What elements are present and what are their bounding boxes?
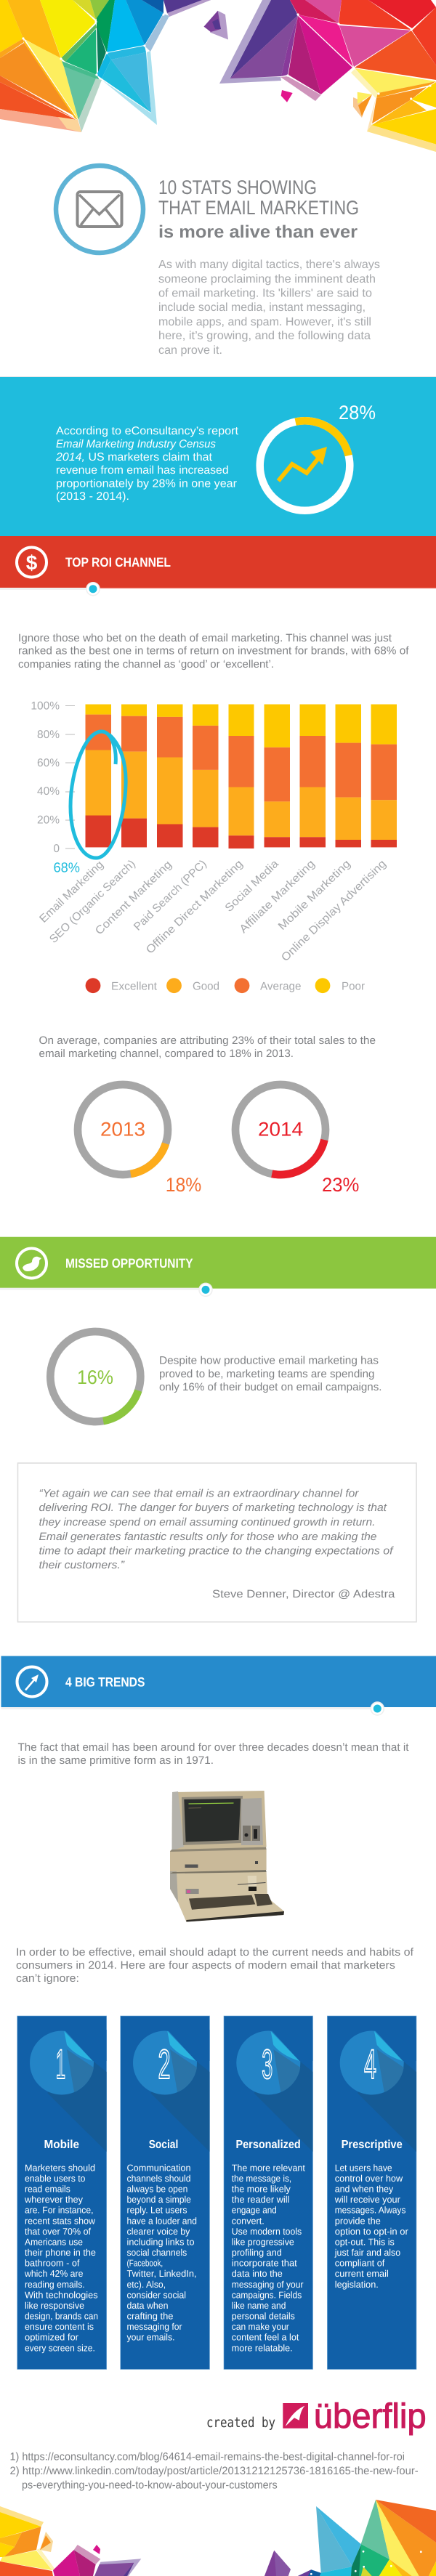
heading: MISSED OPPORTUNITY bbox=[65, 1256, 193, 1271]
card text: which 42% are bbox=[24, 2268, 83, 2279]
card text: their phone in the bbox=[25, 2247, 96, 2258]
hand-drawn highlight ellipse bbox=[70, 732, 126, 858]
small pink shard bbox=[281, 90, 293, 102]
number badge bbox=[30, 2030, 107, 2152]
intro paragraph: mobile apps, and spam. However, it's still bbox=[158, 316, 371, 328]
panel: personalized card bbox=[224, 2016, 312, 2370]
card text: campaigns. Fields bbox=[232, 2289, 302, 2300]
donut: 2013 bbox=[78, 1085, 201, 1196]
card text: every screen size. bbox=[25, 2342, 95, 2353]
card text: like responsive bbox=[25, 2300, 84, 2311]
title: THAT EMAIL MARKETING bbox=[158, 197, 359, 219]
revenue text: 2014, US marketers claim that bbox=[55, 451, 213, 463]
intro paragraph: of email marketing. Its 'killers' are said to bbox=[158, 288, 372, 299]
number badge: 3 bbox=[262, 2041, 272, 2088]
card text: consider social bbox=[126, 2289, 186, 2300]
card text: engage and bbox=[232, 2205, 277, 2216]
bottom right polygon artwork bbox=[265, 2500, 436, 2576]
card text: your emails. bbox=[126, 2332, 174, 2343]
card title: Social bbox=[149, 2139, 178, 2151]
card text: social channels bbox=[126, 2247, 187, 2258]
small orange shard bbox=[353, 92, 372, 118]
card text: have a louder and bbox=[126, 2215, 197, 2226]
card text: compliant of bbox=[335, 2258, 385, 2269]
panel: prescriptive card bbox=[327, 2016, 416, 2370]
section header: top roi channel bbox=[0, 536, 436, 596]
card text: Marketers should bbox=[25, 2162, 95, 2173]
card text: always be open bbox=[126, 2184, 187, 2195]
card text: read emails bbox=[25, 2184, 70, 2195]
quote attribution: Steve Denner, Director @ Adestra bbox=[212, 1588, 395, 1600]
card text: control over how bbox=[335, 2173, 403, 2184]
68 percent callout: 68% bbox=[54, 860, 80, 875]
card text bbox=[232, 2162, 305, 2353]
budget paragraph bbox=[159, 1355, 382, 1393]
card text: the message is, bbox=[232, 2173, 291, 2184]
quote text: “Yet again we can see that email is an extraordinary channel for bbox=[39, 1488, 360, 1499]
card text: are. For instance, bbox=[25, 2205, 93, 2216]
icon: dollar bbox=[17, 548, 47, 577]
donut: 2014: 23% bbox=[322, 1174, 359, 1196]
card text: reply. Let users bbox=[126, 2205, 187, 2216]
progress dot bbox=[371, 1702, 384, 1715]
donut: 2013: 2013 bbox=[100, 1118, 145, 1140]
top left polygon artwork bbox=[0, 0, 211, 132]
icon: arrow bbox=[17, 1666, 47, 1697]
y axis: 100% bbox=[31, 700, 60, 712]
icon: bird bbox=[17, 1248, 47, 1279]
card text: like progressive bbox=[232, 2236, 294, 2248]
icon: email envelope in circle bbox=[56, 166, 143, 253]
quote text: time to adapt their marketing practice to the changing expectations of bbox=[39, 1544, 394, 1557]
card text: just fair and also bbox=[334, 2247, 400, 2258]
title: 10 STATS SHOWING bbox=[158, 177, 317, 198]
card text bbox=[334, 2162, 409, 2290]
card text: enable users to bbox=[25, 2173, 85, 2184]
x axis labels: Mobile Marketing bbox=[276, 858, 353, 933]
panel: social card bbox=[121, 2016, 209, 2370]
revenue text: revenue from email has increased bbox=[56, 464, 229, 477]
roi paragraph: companies rating the channel as ‘good’ or ‘excellent’. bbox=[18, 658, 274, 671]
donut: 2013: 18% bbox=[166, 1174, 201, 1196]
chart legend bbox=[86, 978, 365, 993]
x axis labels: Online Display Advertising bbox=[279, 858, 389, 964]
donut: 16 percent: 16% bbox=[77, 1366, 113, 1388]
intro paragraph: As with many digital tactics, there's always bbox=[158, 259, 380, 271]
card text: design, brands can bbox=[25, 2310, 98, 2322]
bars bbox=[86, 705, 397, 848]
chart legend: Excellent bbox=[111, 981, 158, 992]
budget paragraph: Despite how productive email marketing has bbox=[159, 1355, 379, 1367]
chart legend: Average bbox=[260, 981, 301, 992]
trends paragraph: is in the same primitive form as in 1971. bbox=[17, 1754, 214, 1767]
quote text bbox=[39, 1488, 394, 1571]
card text: bathroom - of bbox=[25, 2258, 80, 2269]
progress dot bbox=[199, 1283, 212, 1296]
card text: the reader will bbox=[232, 2194, 289, 2205]
card text: the more likely bbox=[232, 2184, 291, 2195]
card text: clearer voice by bbox=[126, 2226, 190, 2237]
number badge bbox=[340, 2030, 416, 2152]
x axis labels: Paid Search (PPC) bbox=[132, 858, 209, 933]
revenue text: Email Marketing Industry Census bbox=[56, 438, 216, 450]
x axis labels bbox=[37, 857, 389, 964]
aspects paragraph: can’t ignore: bbox=[16, 1972, 79, 1985]
card text bbox=[24, 2162, 98, 2353]
card text: can make your bbox=[232, 2321, 289, 2332]
progress dot bbox=[86, 583, 100, 596]
card text: and when they bbox=[335, 2184, 394, 2195]
x axis labels: Affiliate Marketing bbox=[237, 858, 318, 936]
roi paragraph: Ignore those who bet on the death of email marketing. This channel was just bbox=[18, 632, 392, 644]
card text: messages. Always bbox=[335, 2205, 405, 2216]
donut: 2014: 2014 bbox=[258, 1118, 303, 1140]
revenue text bbox=[55, 425, 239, 503]
number badge: 1 bbox=[56, 2041, 65, 2088]
aspects paragraph: In order to be effective, email should adapt to the current needs and habits of bbox=[16, 1946, 414, 1959]
x axis labels: SEO (Organic Search) bbox=[47, 858, 138, 946]
chart legend: Poor bbox=[342, 981, 365, 992]
references: 2) http://www.linkedin.com/today/post/article/20131212125736-1816165-the-new-four- bbox=[10, 2465, 419, 2477]
number badge: 2 bbox=[158, 2041, 170, 2088]
revenue text: (2013 - 2014). bbox=[56, 490, 129, 503]
card text: Twitter, LinkedIn, bbox=[126, 2268, 196, 2279]
quote text: they increase spend on email assuming continued growth in return. bbox=[39, 1516, 375, 1528]
revenue text: proportionately by 28% in one year bbox=[56, 478, 237, 490]
y axis bbox=[31, 700, 75, 855]
roi paragraph bbox=[18, 632, 409, 671]
donut: 16 percent bbox=[50, 1332, 140, 1422]
card text: wherever they bbox=[24, 2194, 84, 2205]
card text: recent stats show bbox=[25, 2215, 96, 2226]
card text: legislation. bbox=[335, 2279, 379, 2290]
illustration: vintage computer bbox=[170, 1791, 284, 1922]
sales attribution paragraph: email marketing channel, compared to 18% in 2013. bbox=[39, 1048, 294, 1060]
credit: created by uberflip bbox=[206, 2397, 427, 2436]
card text: will receive your bbox=[334, 2194, 401, 2205]
trends paragraph bbox=[17, 1741, 409, 1767]
card text: messaging of your bbox=[232, 2279, 304, 2290]
card title: Personalized bbox=[235, 2139, 301, 2151]
card text: more relatable. bbox=[232, 2342, 293, 2353]
bottom left polygon artwork bbox=[0, 2506, 141, 2576]
card text bbox=[126, 2162, 197, 2343]
section header: missed opportunity bbox=[0, 1237, 436, 1296]
intro paragraph: someone proclaiming the imminent death bbox=[158, 273, 376, 285]
title bbox=[158, 177, 359, 242]
x axis labels: Offline Direct Marketing bbox=[144, 858, 246, 957]
budget paragraph: proved to be, marketing teams are spending bbox=[159, 1368, 375, 1380]
x axis labels: Email Marketing bbox=[37, 859, 106, 926]
small purple shard bbox=[203, 11, 228, 39]
sales attribution paragraph: On average, companies are attributing 23% of their total sales to the bbox=[39, 1034, 376, 1047]
y axis: 20% bbox=[37, 814, 60, 827]
card text: personal details bbox=[232, 2310, 295, 2322]
card text: optimized for bbox=[25, 2332, 79, 2343]
quote text: Email generates fantastic results only for those who are making the bbox=[39, 1531, 376, 1543]
section header: 4 big trends bbox=[1, 1656, 436, 1715]
credit: created by uberflip: created by bbox=[206, 2415, 275, 2431]
credit: created by uberflip: überflip bbox=[314, 2397, 427, 2436]
28 percent label: 28% bbox=[339, 402, 376, 424]
references bbox=[10, 2451, 419, 2492]
intro paragraph: include social media, instant messaging, bbox=[158, 301, 366, 314]
card text: With technologies bbox=[25, 2289, 98, 2300]
top right polygon artwork bbox=[219, 0, 436, 152]
references: ps-everything-you-need-to-know-about-your-customers bbox=[22, 2479, 278, 2492]
revenue text: According to eConsultancy’s report bbox=[56, 425, 239, 437]
card text: that over 70% of bbox=[25, 2226, 91, 2237]
card title: Mobile bbox=[44, 2139, 79, 2151]
y axis: 80% bbox=[37, 729, 60, 741]
number badge: 4 bbox=[364, 2041, 376, 2088]
stacked bar chart bbox=[31, 700, 397, 964]
card text: provide the bbox=[335, 2215, 381, 2226]
card text: Let users have bbox=[335, 2162, 392, 2173]
aspects paragraph bbox=[16, 1946, 414, 1985]
intro paragraph: can prove it. bbox=[158, 344, 222, 357]
number badge bbox=[236, 2030, 312, 2152]
chart legend: Good bbox=[193, 981, 219, 992]
card text: (Facebook, bbox=[126, 2258, 163, 2269]
card text: opt-out. This is bbox=[335, 2236, 395, 2248]
panel: quote box bbox=[17, 1463, 416, 1622]
card text: data into the bbox=[232, 2268, 283, 2279]
trends paragraph: The fact that email has been around for over three decades doesn’t mean that it bbox=[17, 1741, 409, 1754]
y axis: 40% bbox=[37, 785, 60, 798]
aspects paragraph: consumers in 2014. Here are four aspects of modern email that marketers bbox=[16, 1959, 395, 1972]
intro paragraph bbox=[158, 259, 380, 357]
card text: content feel a lot bbox=[232, 2332, 299, 2343]
card text: incorporate that bbox=[232, 2258, 297, 2269]
card text: option to opt-in or bbox=[335, 2226, 409, 2237]
panel: revenue stat bbox=[0, 376, 436, 536]
card text: Use modern tools bbox=[232, 2226, 302, 2237]
heading: 4 BIG TRENDS bbox=[65, 1675, 145, 1690]
icon: uberflip logo mark bbox=[283, 2403, 308, 2429]
x axis labels: Social Media bbox=[223, 857, 281, 915]
y axis: 0 bbox=[53, 843, 60, 855]
panel: mobile card bbox=[17, 2016, 107, 2370]
card title: Prescriptive bbox=[342, 2139, 403, 2151]
intro paragraph: here, it’s growing, and the following data bbox=[158, 330, 371, 342]
card text: Communication bbox=[126, 2162, 190, 2173]
card text: like name and bbox=[232, 2300, 286, 2311]
sales attribution paragraph bbox=[39, 1034, 376, 1060]
card text: etc). Also, bbox=[126, 2279, 166, 2290]
card text: convert. bbox=[232, 2215, 265, 2226]
quote text: delivering ROI. The danger for buyers of marketing technology is that bbox=[39, 1502, 387, 1514]
card text: data when bbox=[126, 2300, 169, 2311]
card text: reading emails. bbox=[25, 2279, 85, 2290]
donut: 2014 bbox=[235, 1085, 359, 1196]
card text: beyond a simple bbox=[126, 2194, 191, 2205]
donut with growth arrow bbox=[260, 421, 350, 511]
card text: current email bbox=[335, 2268, 389, 2279]
card text: channels should bbox=[126, 2173, 190, 2184]
heading: TOP ROI CHANNEL bbox=[65, 555, 171, 570]
title: is more alive than ever bbox=[158, 222, 358, 242]
references: 1) https://econsultancy.com/blog/64614-email-remains-the-best-digital-channel-for-roi bbox=[10, 2451, 405, 2463]
roi paragraph: ranked as the best one in terms of return on investment for brands, with 68% of bbox=[18, 645, 409, 657]
card text: crafting the bbox=[126, 2310, 173, 2322]
budget paragraph: only 16% of their budget on email campaigns. bbox=[159, 1381, 382, 1393]
number badge bbox=[133, 2030, 209, 2152]
icon: dollar: $ bbox=[26, 551, 38, 574]
card text: including links to bbox=[126, 2236, 195, 2248]
card text: messaging for bbox=[126, 2321, 182, 2332]
card text: Americans use bbox=[25, 2236, 83, 2248]
y axis: 60% bbox=[37, 757, 60, 769]
card text: profiling and bbox=[232, 2247, 282, 2258]
quote text: their customers.” bbox=[39, 1559, 125, 1571]
x axis labels: Content Marketing bbox=[93, 859, 174, 937]
card text: The more relevant bbox=[232, 2162, 305, 2173]
card text: ensure content is bbox=[25, 2321, 94, 2332]
